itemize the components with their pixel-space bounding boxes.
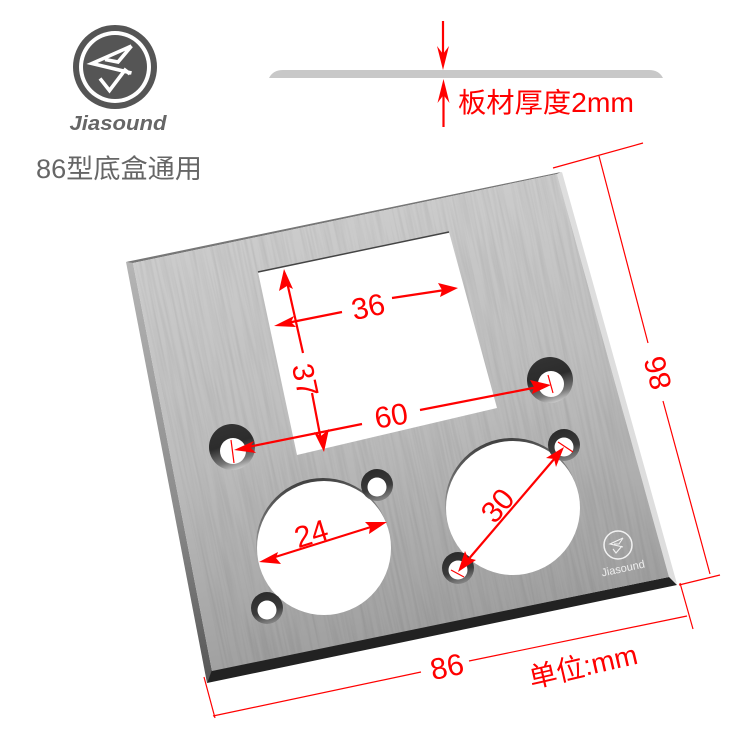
engraved logo on plate: Jiasound (600, 559, 646, 579)
small screw hole: right upper (548, 429, 580, 461)
dimension: hole diameter 24: 24 (291, 514, 332, 555)
small screw hole: left upper (361, 469, 393, 501)
arrow: thickness down (437, 21, 449, 70)
dimension: window width 36: 36 (349, 288, 388, 327)
dimension: plate height 86 (553, 143, 720, 585)
large connector hole: left (256, 478, 391, 615)
panel: brushed metal plate (126, 168, 677, 683)
dimension: plate height 86: 86 (638, 352, 679, 393)
dimension: screw spacing 60: 60 (372, 397, 411, 436)
icon: Jiasound circular emblem (73, 25, 157, 109)
large connector hole: right (445, 438, 580, 575)
plate bevels (126, 172, 677, 683)
dimension: connector screw spacing 30: 30 (475, 483, 522, 529)
thickness label: 板材厚度2mm (458, 87, 634, 118)
plate face (133, 174, 669, 671)
arrow: thickness up (438, 79, 450, 127)
unit note: 单位:mm (526, 639, 640, 694)
dimension: plate width 86 (204, 583, 693, 718)
small screw hole: left lower (251, 592, 283, 624)
screw hole: upper right (527, 357, 573, 403)
dimension: connector screw spacing 30 (451, 442, 573, 577)
dimension: plate width 86: 86 (427, 648, 467, 687)
dimension: screw spacing 60 (231, 375, 553, 463)
engraved logo on plate (600, 531, 646, 579)
dimension: hole diameter 24 (259, 514, 387, 564)
heading: 86 box compatibility: 86型底盒通用 (36, 154, 202, 184)
plate edge bar (269, 70, 663, 78)
dimension: window height 37: 37 (285, 361, 324, 400)
brand name: Jiasound (70, 113, 167, 135)
dimension: window height 37 (279, 269, 329, 452)
thickness diagram (269, 21, 663, 127)
logo: Jiasound (70, 25, 167, 135)
rectangular window cut-out (258, 232, 497, 455)
small screw hole: right lower (442, 552, 474, 584)
dimension: window width 36 (274, 283, 458, 327)
screw hole: upper left (209, 424, 255, 470)
